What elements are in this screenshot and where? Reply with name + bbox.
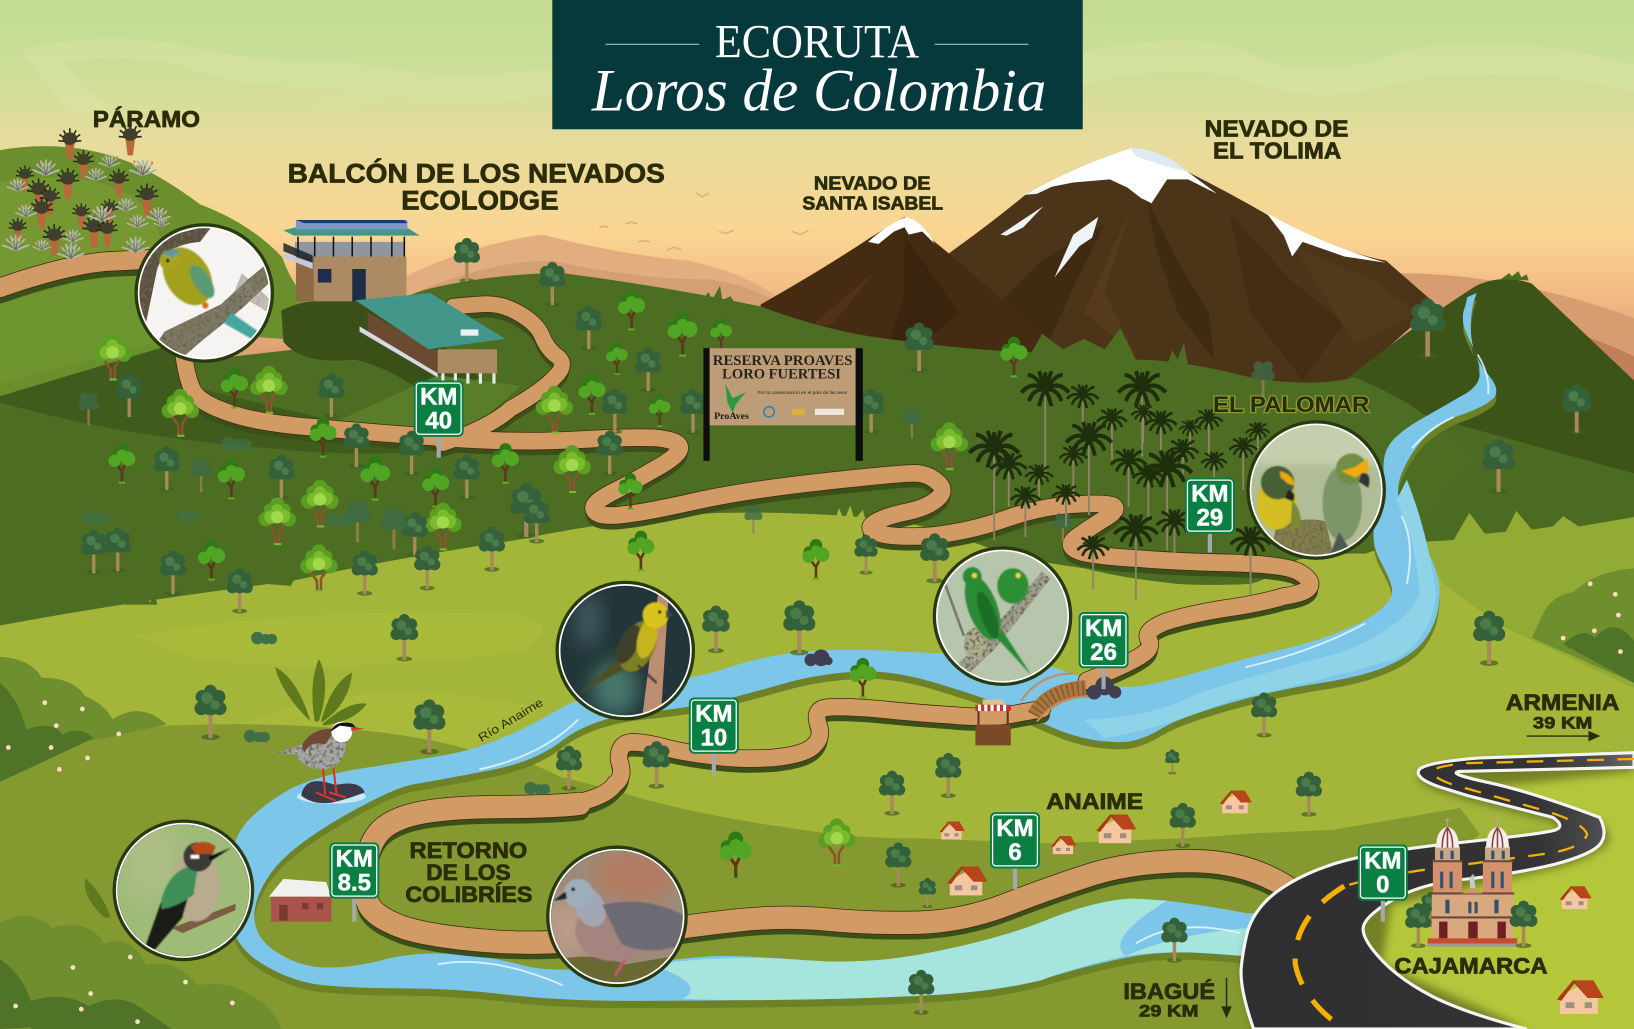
- reserve sign: [703, 348, 863, 461]
- clouds: [21, 39, 1634, 119]
- label: Balcón de los Nevados Ecolodge: BALCÓN DE LOS NEVADOS: [288, 157, 665, 188]
- river bank shadow: [228, 300, 1496, 1008]
- trees on meadow and right slope: [194, 298, 1591, 1015]
- label: Nevado de Santa Isabel: SANTA ISABEL: [802, 193, 943, 214]
- dirt road network: [0, 259, 1310, 949]
- label: Nevado de El Tolima: EL TOLIMA: [1213, 137, 1341, 163]
- bright land at Cajamarca: [1355, 766, 1634, 1029]
- highway centre line: [1344, 759, 1634, 886]
- green slope under path: [0, 273, 188, 384]
- leaf plant behind duck: [275, 659, 367, 726]
- label: Páramo: PÁRAMO: [93, 106, 200, 132]
- wooden bridge: [1021, 673, 1089, 721]
- sign small text: Por la conservación en el país de las aves: [758, 390, 848, 396]
- title panel: [552, 0, 1083, 129]
- wax palm grove: [969, 371, 1270, 601]
- olive lower land: [0, 724, 1480, 1029]
- sign heading: RESERVA PROAVES: [713, 353, 852, 369]
- lodge lawn shadow: [281, 300, 479, 401]
- páramo inner light: [0, 177, 161, 288]
- sign: KM 29: KM: [1191, 480, 1229, 507]
- highway centre line wide: [1295, 886, 1344, 1029]
- lighter right band: [1417, 511, 1634, 688]
- decorative bush: left: [0, 657, 167, 782]
- houses: [940, 790, 1604, 1014]
- sign logo bird: [725, 384, 746, 413]
- photo: green parrots on branch: [933, 546, 1072, 686]
- sign: KM 40: KM: [420, 384, 457, 411]
- title line two: Loros de Colombia: [591, 57, 1046, 125]
- label: Armenia 39 km with arrow: [1506, 690, 1620, 740]
- label: Balcón de los Nevados Ecolodge: [288, 157, 665, 216]
- sign: KM 8.5: [329, 842, 379, 922]
- label: Ibagué 29 km with arrow: 29 KM: [1139, 1001, 1198, 1020]
- sign: KM 6: KM: [996, 815, 1034, 842]
- top meadow at road: [1480, 777, 1634, 844]
- red barn: [269, 879, 331, 922]
- sign: KM 26: KM: [1085, 615, 1122, 642]
- sign heading second line: LORO FUERTESI: [722, 366, 841, 382]
- market stall: [975, 700, 1011, 745]
- lawn highlight: [307, 375, 521, 440]
- sign: KM 40: [414, 381, 464, 458]
- photo: yellow-headed tanager: [555, 581, 695, 720]
- meadow light patches: [135, 612, 542, 751]
- label: Nevado de El Tolima: NEVADO DE: [1205, 116, 1348, 142]
- label: Cajamarca: CAJAMARCA: [1394, 954, 1548, 979]
- decorative bush: bottom left: [0, 916, 281, 1029]
- forest slope: [0, 273, 1480, 626]
- pale right stretch: [1125, 928, 1261, 957]
- forest dark wedge: [0, 337, 448, 454]
- leaf plant behind hummingbird: [85, 878, 110, 917]
- rocks at bridge: [1087, 677, 1121, 700]
- right slope: [1391, 423, 1634, 542]
- mountain: Nevado de Santa Isabel: [761, 217, 1042, 360]
- label: Nevado de Santa Isabel: [802, 173, 943, 214]
- label: Retorno de los Colibríes: COLIBRÍES: [405, 882, 533, 907]
- torrent duck on rock: [277, 721, 366, 804]
- label: Retorno de los Colibríes: RETORNO: [410, 838, 527, 863]
- river: Río Anaime: [228, 293, 1496, 1001]
- label: Nevado de El Tolima: [1205, 116, 1348, 163]
- sign: KM 10: 10: [700, 724, 727, 751]
- label: Armenia 39 km with arrow: 39 KM: [1533, 714, 1592, 733]
- sign: KM 0: [1358, 844, 1408, 922]
- right hill: [1344, 279, 1634, 480]
- label: Anaime: ANAIME: [1046, 789, 1143, 814]
- label: Retorno de los Colibríes: [405, 838, 533, 907]
- rock in river: [804, 650, 833, 666]
- sign: KM 40: 40: [425, 407, 452, 434]
- grass tufts light: [834, 506, 867, 526]
- title line one: ECORUTA: [715, 15, 919, 68]
- distant hills: [406, 235, 1634, 438]
- label: Armenia 39 km with arrow: ARMENIA: [1506, 690, 1620, 715]
- sign: KM 0: 0: [1376, 871, 1390, 898]
- sign: KM 8.5: KM: [336, 845, 373, 872]
- sign: KM 6: 6: [1008, 839, 1022, 866]
- sign logo text: ProAves: [714, 411, 749, 422]
- white water streaks: [438, 354, 1488, 985]
- label: Ibagué 29 km with arrow: IBAGUÉ: [1123, 979, 1215, 1004]
- label: Nevado de Santa Isabel: NEVADO DE: [814, 173, 931, 194]
- sign: KM 8.5: 8.5: [338, 869, 371, 896]
- mountain: Nevado del Tolima: [943, 148, 1436, 388]
- decorative bush: right: [1532, 568, 1634, 683]
- sign: KM 29: 29: [1197, 504, 1223, 531]
- label: Ibagué 29 km with arrow: [1123, 978, 1231, 1020]
- grass tufts: [125, 271, 1529, 605]
- sign wood board: [710, 348, 856, 425]
- páramo hill: [0, 146, 354, 396]
- distant birds: [599, 193, 809, 250]
- photo: yellow-eared parrots: [1246, 420, 1386, 560]
- highway shadow: [1241, 757, 1634, 1029]
- lodge lower building: [355, 293, 505, 384]
- sign: KM 26: 26: [1090, 639, 1117, 666]
- sign: KM 10: KM: [695, 700, 732, 727]
- sign: KM 10: [689, 697, 739, 775]
- páramo frailejones: [2, 124, 171, 259]
- church of Cajamarca: [1428, 818, 1517, 947]
- label: Retorno de los Colibríes: DE LOS: [426, 860, 511, 885]
- sign: KM 26: [1079, 612, 1129, 689]
- sign logos: [764, 407, 844, 417]
- photo: dove: [542, 846, 688, 987]
- highway: [1241, 753, 1634, 1029]
- lower river pale water: [651, 899, 1167, 1000]
- meadow base: [0, 469, 1634, 1029]
- label: Río Anaime: Río Anaime: [476, 695, 546, 745]
- photo: hummingbird: [113, 818, 254, 961]
- label: El Palomar: EL PALOMAR: [1213, 392, 1370, 417]
- sign: KM 0: KM: [1364, 847, 1401, 874]
- sign: KM 6: [990, 812, 1040, 889]
- trees on upper slope: [78, 238, 1028, 613]
- trees behind church: [1421, 892, 1441, 927]
- photo: Pyrrhura calliptera on mossy branch: [134, 223, 274, 367]
- sky background: [0, 0, 1634, 469]
- upper river lighter water: [1084, 480, 1436, 738]
- lodge upper building: [283, 220, 420, 301]
- trees beside church: [1405, 901, 1537, 948]
- sign: KM 29: [1185, 477, 1235, 553]
- label: Balcón de los Nevados Ecolodge: ECOLODGE: [401, 185, 559, 216]
